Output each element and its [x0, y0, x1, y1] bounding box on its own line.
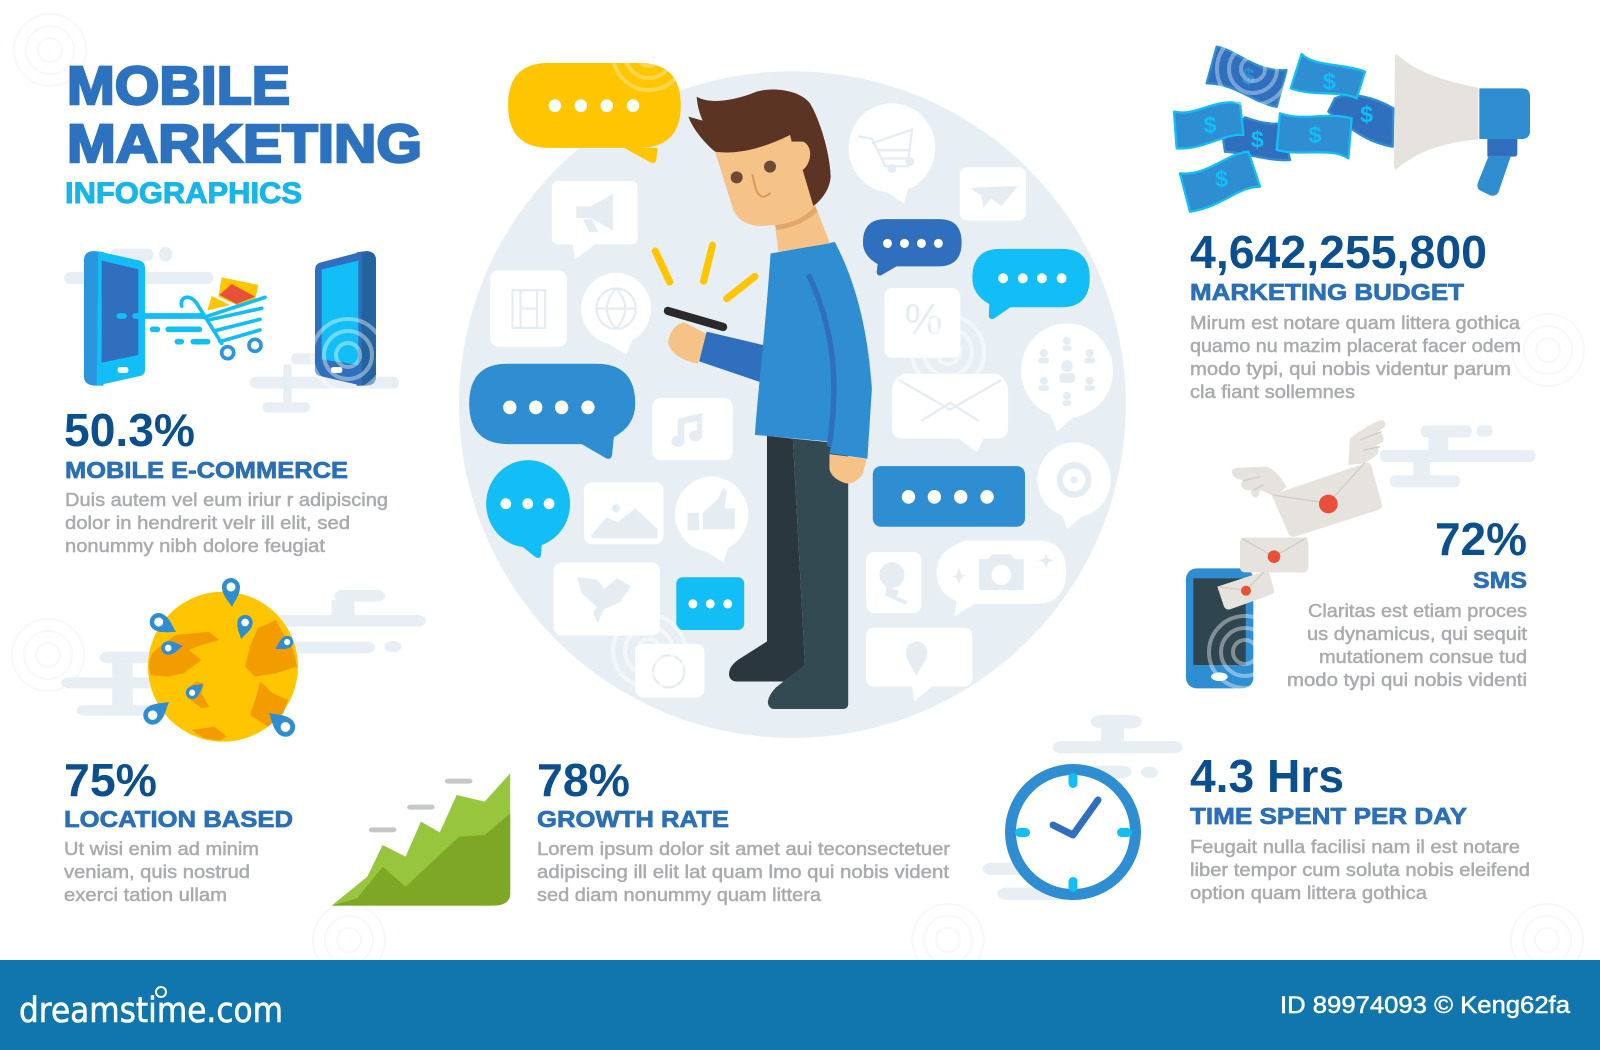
speech bubble: dark blue	[863, 219, 962, 276]
stat: time spent per day: TIME SPENT PER DAY	[1190, 803, 1467, 829]
stat: sms: SMS	[1473, 567, 1527, 593]
title: INFOGRAPHICS	[65, 177, 302, 210]
stat: location based: Ut wisi enim ad minim	[64, 838, 259, 859]
stat: location based: LOCATION BASED	[64, 806, 293, 832]
stat: sms: us dynamicus, qui sequit	[1307, 623, 1527, 644]
person	[668, 89, 872, 709]
speech bubble: mid blue	[469, 364, 635, 459]
stat: time spent per day: option quam littera gothica	[1190, 882, 1428, 903]
stat: sms	[1287, 513, 1527, 690]
background circle	[459, 71, 1126, 738]
speech bubble: small square	[676, 577, 744, 630]
footer banner: dreamstime.com	[19, 991, 283, 1031]
stat: marketing budget: modo typi, qui nobis videntur parum	[1190, 358, 1511, 379]
stat: location based	[64, 754, 293, 905]
stat: mobile e-commerce: nonummy nibh dolore feugiat	[65, 535, 325, 556]
icon: money and megaphone: $	[1251, 126, 1264, 152]
icon: money and megaphone: $	[1204, 112, 1217, 138]
stat: marketing budget: Mirum est notare quam littera gothica	[1190, 312, 1521, 333]
stat: time spent per day: 4.3 Hrs	[1190, 750, 1344, 802]
app icon tiles: %	[904, 295, 942, 344]
stat: sms: 72%	[1435, 513, 1527, 565]
stat: marketing budget: 4,642,255,800	[1190, 226, 1487, 278]
central illustration: person with chat bubbles	[459, 63, 1126, 738]
icon: money and megaphone	[1174, 47, 1530, 212]
stat: marketing budget: MARKETING BUDGET	[1190, 279, 1464, 305]
stat: growth rate: Lorem ipsum dolor sit amet aui teconsectetuer	[537, 838, 950, 859]
stat: location based: veniam, quis nostrud	[64, 861, 250, 882]
icon: phone notification rays	[655, 245, 755, 299]
speech bubble: round light blue	[486, 460, 570, 558]
title: MARKETING	[67, 114, 422, 174]
speech bubble: light blue	[972, 249, 1090, 319]
footer banner: ID 89974093 © Keng62fa	[1280, 992, 1570, 1019]
stat: marketing budget: cla fiant sollemnes	[1190, 381, 1355, 402]
icon: flying envelopes and phone	[1186, 420, 1536, 688]
icon: money and megaphone: $	[1215, 166, 1228, 192]
stat: growth rate: adipiscing ill elit lat quam lmo qui nobis vident	[537, 861, 949, 882]
app icon tiles	[490, 103, 1113, 701]
stat: mobile e-commerce	[64, 404, 388, 556]
stat: time spent per day: liber tempor cum soluta nobis eleifend	[1190, 859, 1530, 880]
icon: phones and shopping cart	[64, 247, 399, 413]
chart: growth area	[332, 773, 510, 906]
footer banner	[0, 960, 1600, 1050]
stat: time spent per day: Feugait nulla facilisi nam il est notare	[1190, 836, 1520, 857]
speech bubble: yellow	[508, 63, 681, 163]
icon: clock	[983, 715, 1183, 900]
icon: money and megaphone: $	[1309, 122, 1322, 148]
icon: money and megaphone: $	[1242, 64, 1255, 90]
stat: growth rate	[537, 754, 950, 905]
stat: mobile e-commerce: Duis autem vel eum iriur r adipiscing	[65, 489, 388, 510]
speech bubble: rectangle	[873, 466, 1025, 527]
stat: sms: mutationem consue tud	[1319, 646, 1527, 667]
stat: mobile e-commerce: MOBILE E-COMMERCE	[65, 457, 348, 483]
icon: globe with location pins	[61, 578, 426, 742]
stat: time spent per day	[1190, 750, 1530, 903]
stat: growth rate: 78%	[537, 754, 630, 806]
watermark spirals	[312, 18, 1289, 688]
stat: mobile e-commerce: 50.3%	[64, 404, 195, 456]
icon: money and megaphone: $	[1323, 69, 1336, 95]
stat: growth rate: GROWTH RATE	[537, 806, 729, 832]
stat: sms: modo typi qui nobis videnti	[1287, 669, 1527, 690]
icon: money and megaphone: $	[1360, 102, 1373, 128]
stat: location based: 75%	[64, 754, 157, 806]
stat: mobile e-commerce: dolor in hendrerit velr ill elit, sed	[65, 512, 350, 533]
stat: location based: exerci tation ullam	[64, 884, 227, 905]
title	[65, 56, 422, 210]
stat: sms: Claritas est etiam proces	[1308, 600, 1527, 621]
title: MOBILE	[67, 56, 290, 116]
stat: marketing budget	[1190, 226, 1521, 402]
stat: growth rate: sed diam nonummy quam littera	[537, 884, 822, 905]
stat: marketing budget: quamo nu mazim placerat facer odem	[1190, 335, 1521, 356]
